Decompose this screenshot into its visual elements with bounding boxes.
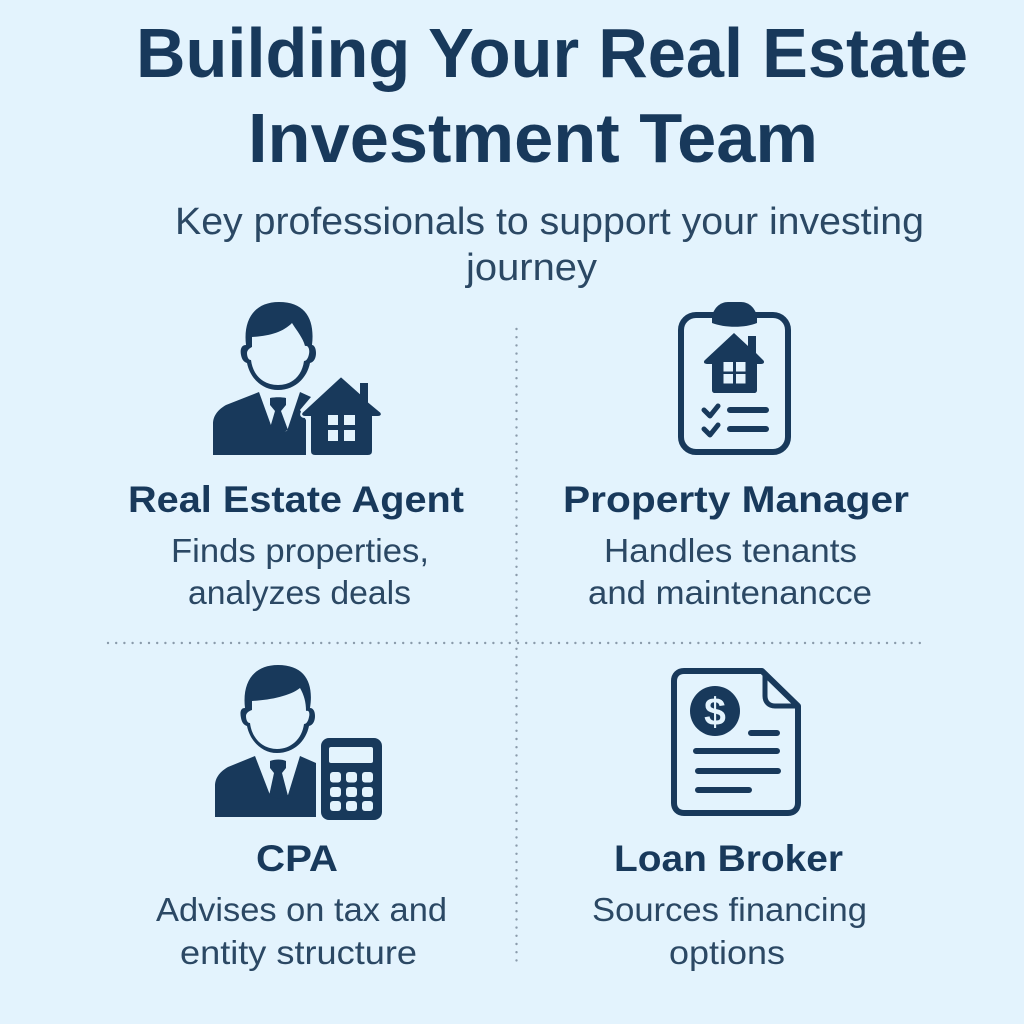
panel: real estate agent: [128, 302, 464, 611]
title: Investment Team: [248, 99, 818, 177]
subtitle: journey: [465, 247, 597, 289]
description: [156, 891, 447, 971]
description: Sources financing: [592, 891, 867, 928]
panel: property manager: [563, 302, 909, 611]
description: Finds properties,: [171, 532, 429, 569]
panel: loan broker: [592, 671, 867, 971]
description: options: [669, 934, 785, 971]
description: Advises on tax and: [156, 891, 447, 928]
title: Building Your Real Estate: [136, 14, 968, 92]
heading: Loan Broker: [614, 838, 843, 879]
description: [588, 532, 872, 611]
icon: loan document: $: [704, 691, 726, 734]
subtitle: Key professionals to support your investing: [175, 201, 924, 243]
panel: cpa: [156, 665, 447, 971]
heading: Property Manager: [563, 479, 909, 520]
subtitle: [175, 201, 924, 289]
heading: Real Estate Agent: [128, 479, 464, 520]
description: analyzes deals: [188, 574, 411, 611]
icon: accountant with calculator: [215, 665, 382, 820]
description: entity structure: [180, 934, 417, 971]
heading: CPA: [256, 838, 338, 879]
description: and maintenancce: [588, 574, 872, 611]
icon: clipboard with house: [681, 302, 788, 452]
icon: loan document: [674, 671, 798, 813]
description: [592, 891, 867, 971]
description: [171, 532, 429, 611]
title: [136, 14, 968, 177]
icon: agent with house: [213, 302, 382, 456]
description: Handles tenants: [604, 532, 857, 569]
